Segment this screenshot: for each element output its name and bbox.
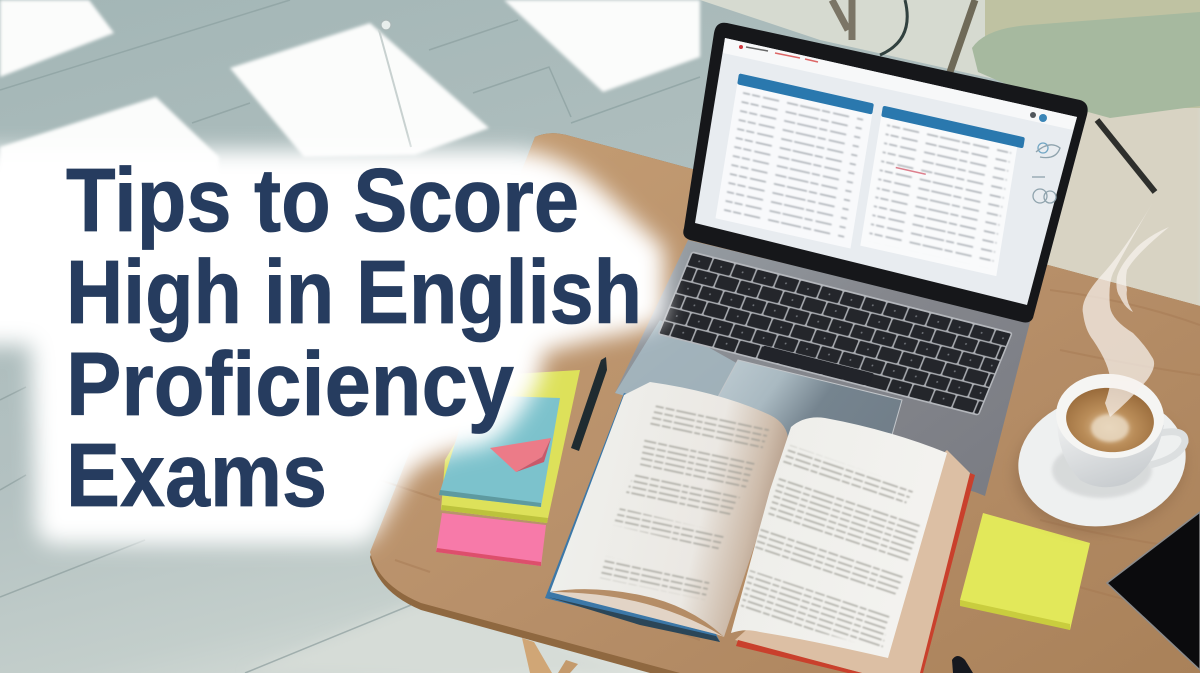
- yellow sticky note on table: [960, 513, 1090, 630]
- pink folded flag on sticky notes: [490, 438, 551, 472]
- saucer: [1010, 385, 1194, 537]
- screen: [695, 38, 1077, 305]
- pen: [571, 357, 607, 451]
- left page text: [600, 402, 770, 600]
- tablet: [1107, 512, 1200, 670]
- right page text: [740, 445, 922, 650]
- title line 1: Tips to Score: [66, 151, 579, 251]
- wooden table: [370, 133, 1200, 673]
- right page: [731, 417, 947, 658]
- red back cover: [915, 473, 975, 673]
- left exam panel: [715, 73, 874, 249]
- table legs: [522, 638, 552, 673]
- background: chair and floor at upper right: [700, 0, 1200, 330]
- keyboard: [658, 252, 1012, 415]
- laptop: [615, 23, 1088, 496]
- blue front cover: [545, 393, 720, 642]
- sticky notes stack: [436, 370, 580, 566]
- cup handle: [1150, 432, 1185, 465]
- screen sidebar icons: [1032, 143, 1060, 203]
- laptop base: [615, 240, 1030, 496]
- blue sticky note: [439, 395, 560, 507]
- cup body: [1057, 415, 1164, 487]
- title line 3: Proficiency: [66, 335, 514, 435]
- steam: [1083, 202, 1169, 417]
- pink sticky note: [436, 513, 546, 566]
- right exam panel: [860, 106, 1025, 277]
- title line 4: Exams: [66, 426, 327, 526]
- white glow behind title: [0, 150, 664, 544]
- trackpad: [700, 360, 902, 470]
- yellow sticky note: [441, 370, 580, 523]
- pen cap: [952, 656, 973, 673]
- coffee cup on saucer: [1006, 202, 1194, 543]
- left page: [550, 382, 788, 637]
- coffee: [1063, 384, 1157, 456]
- page block: [735, 450, 970, 673]
- title line 2: High in English: [66, 243, 642, 343]
- left page edge: [550, 592, 724, 637]
- sunlight patches: [0, 0, 700, 180]
- title: [66, 151, 642, 526]
- open book: [545, 382, 975, 673]
- laptop lid: [683, 23, 1088, 322]
